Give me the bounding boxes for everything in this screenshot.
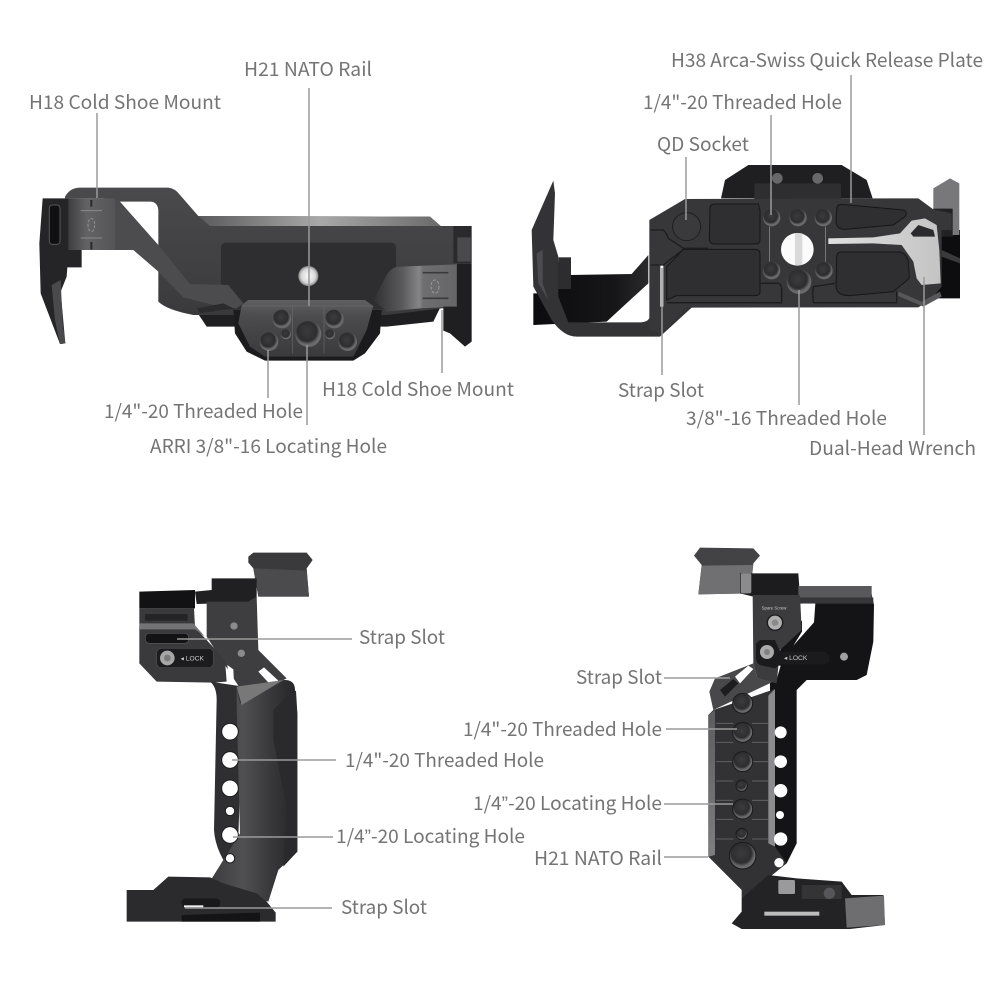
- diagonal strap link: [709, 663, 773, 710]
- center plate: [207, 597, 287, 688]
- mount holes: [260, 310, 357, 351]
- through holes: [222, 723, 238, 863]
- product view: right side, bottom-right panel: ◂ LOCK: [784, 655, 808, 662]
- QD socket: [673, 213, 701, 241]
- label: 3/8-16 threaded hole: 3/8"-16 Threaded Hole: [686, 404, 887, 431]
- label: locating hole bottom-left: 1/4”-20 Locating Hole: [336, 822, 525, 849]
- strap slot: [145, 633, 189, 643]
- lower channels: [667, 283, 897, 303]
- label: strap slot top right: Strap Slot: [618, 376, 704, 403]
- column: [210, 682, 243, 887]
- grip: [207, 680, 297, 902]
- label: 1/4-20 threaded hole top right: 1/4"-20 Threaded Hole: [643, 88, 842, 115]
- product view: right side, bottom-right panel: Spare Screw: [762, 606, 787, 611]
- label: strap slot bottom-right: Strap Slot: [576, 663, 662, 690]
- diagonal arm: [105, 198, 243, 308]
- label: H21 NATO rail bottom-right: H21 NATO Rail: [534, 844, 662, 871]
- lock lever: [756, 640, 829, 668]
- product view: left side, bottom-left panel: ◂ LOCK: [181, 656, 205, 663]
- left clip: [39, 198, 82, 344]
- product view: right side, bottom-right panel: [694, 548, 885, 929]
- main body: [65, 188, 457, 315]
- base: [127, 877, 276, 922]
- cold shoe right: [373, 264, 457, 312]
- wrench: [828, 218, 941, 285]
- left block: [139, 608, 227, 683]
- top mount block: [694, 548, 760, 594]
- rail grooves: [716, 723, 768, 839]
- center hole with pin: [781, 233, 814, 266]
- label: locating hole bottom-right: 1/4”-20 Locating Hole: [473, 789, 662, 816]
- top mount block: [248, 553, 313, 597]
- label: threaded hole bottom-left: 1/4"-20 Threaded Hole: [345, 746, 544, 773]
- label: H18 Cold Shoe Mount left: H18 Cold Shoe Mount: [29, 88, 221, 115]
- NATO block: [233, 310, 382, 361]
- cold shoe left: [68, 198, 115, 250]
- label: strap slot bottom-left upper: Strap Slot: [359, 623, 445, 650]
- top shoe: [740, 573, 800, 597]
- main plate: [649, 198, 952, 333]
- recessed pads: [667, 204, 909, 300]
- left curved flap and loop: [532, 181, 720, 337]
- label: H18 Cold Shoe Mount right: H18 Cold Shoe Mount: [322, 375, 514, 402]
- top shoe: [195, 578, 257, 604]
- right clip: [443, 263, 472, 347]
- product view: cage top, left panel: [39, 188, 472, 361]
- lower dark band: [193, 307, 441, 327]
- label: 1/4-20 threaded hole: 1/4"-20 Threaded Hole: [104, 397, 303, 424]
- product view: left side, bottom-left panel: [127, 553, 313, 922]
- through holes: [774, 726, 787, 867]
- white window: [793, 604, 815, 646]
- right edge bracket: [453, 226, 472, 263]
- black rear panel: [770, 587, 874, 872]
- threaded holes: [763, 209, 833, 294]
- rail holes: [729, 693, 756, 869]
- label: H38 Arca-Swiss plate: H38 Arca-Swiss Quick Release Plate: [671, 46, 983, 73]
- label: ARRI locating hole: ARRI 3/8"-16 Locating Hole: [150, 432, 387, 459]
- base: [732, 875, 885, 929]
- slots beside center: [769, 227, 825, 262]
- label: dual-head wrench: Dual-Head Wrench: [809, 434, 976, 461]
- upper center plate: [753, 595, 802, 683]
- NATO rail: [708, 689, 787, 898]
- left shoe: [139, 590, 195, 608]
- label: H21 NATO Rail top: H21 NATO Rail: [244, 55, 372, 82]
- leader lines: [97, 75, 924, 908]
- bottom right lip: [898, 292, 942, 307]
- label: QD socket: QD Socket: [657, 130, 749, 157]
- inset plate: [221, 243, 396, 309]
- product view: cage bottom, right panel: [532, 165, 960, 337]
- label: threaded hole bottom-right: 1/4"-20 Threaded Hole: [463, 715, 662, 742]
- lock plate: [157, 648, 213, 668]
- label: strap slot bottom-left lower: Strap Slot: [341, 893, 427, 920]
- back interior: [533, 255, 648, 325]
- top sheen: [198, 216, 441, 226]
- quick release plate behind: [721, 165, 873, 198]
- left column slot: [660, 265, 663, 307]
- right side clutter: [917, 230, 960, 298]
- center pin: [298, 266, 318, 286]
